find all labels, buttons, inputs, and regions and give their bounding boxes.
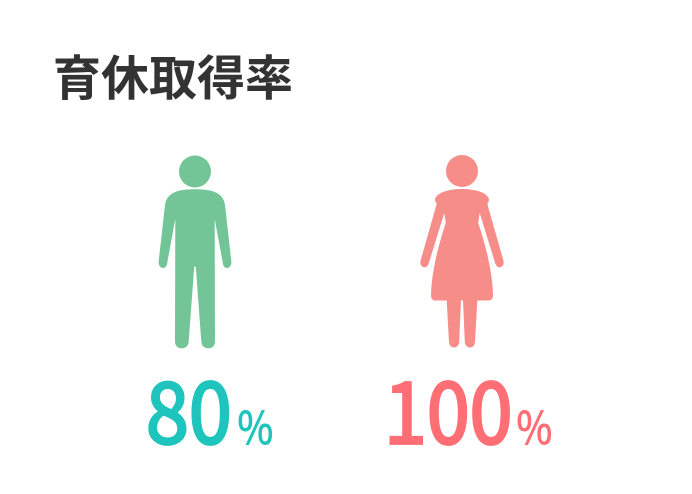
icon: man figure: [159, 156, 231, 348]
stat: 80 percent: %: [238, 393, 273, 458]
title: 育休取得率: [53, 39, 293, 109]
stat: 100 percent: 100: [384, 348, 512, 468]
stat: 80 percent: 80: [146, 348, 232, 468]
stat: 80 percent: [146, 348, 273, 468]
icon: woman figure: [420, 155, 504, 348]
stat: 100 percent: %: [516, 393, 552, 458]
